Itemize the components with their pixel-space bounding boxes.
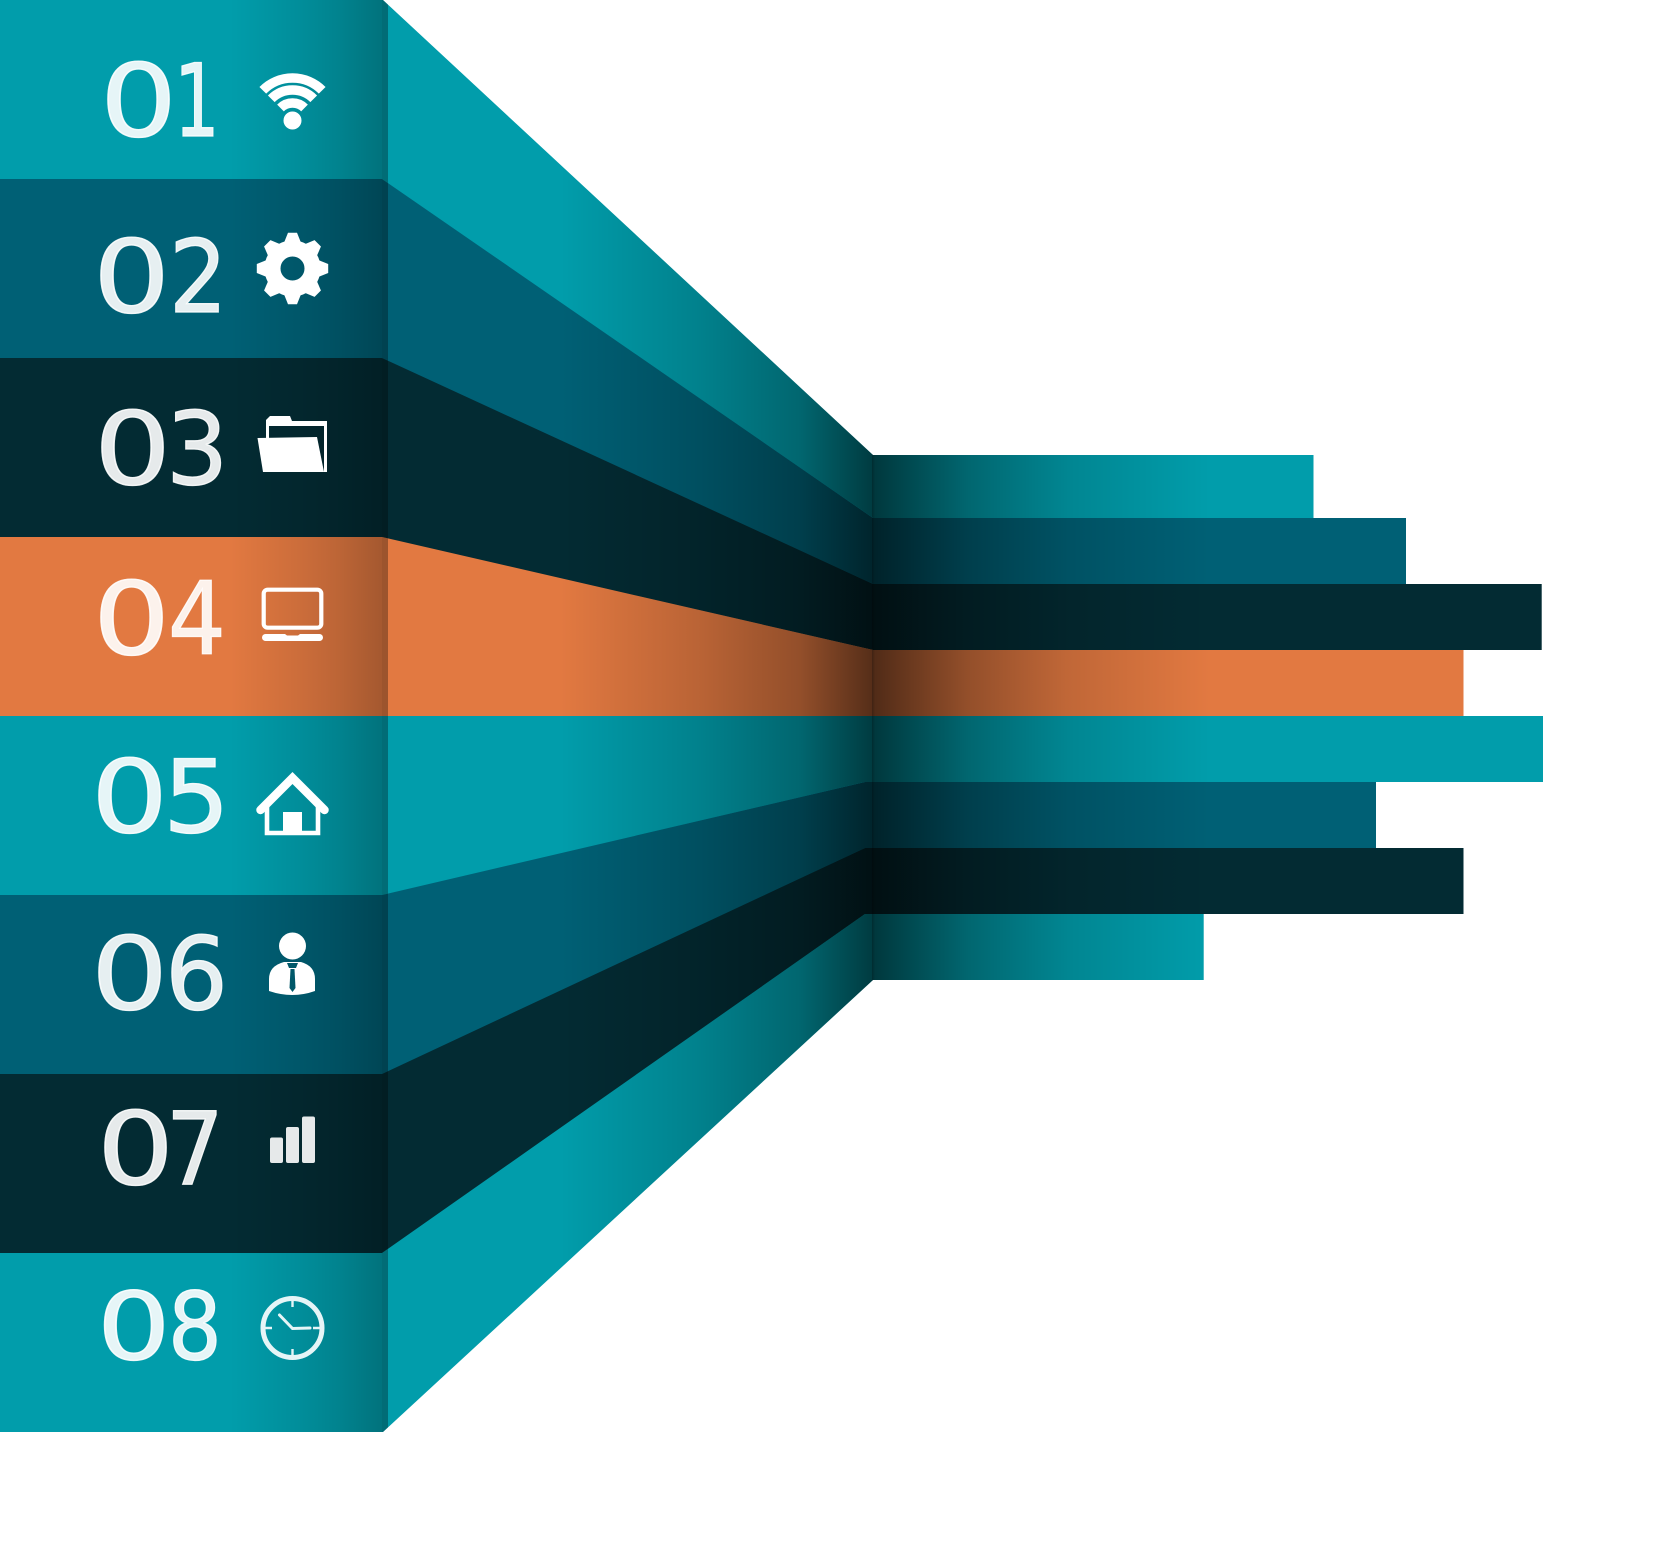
number 02 [93, 218, 227, 336]
icon: house [260, 778, 324, 833]
icon: businessperson [269, 932, 315, 995]
band 01 teal [0, 0, 1314, 519]
number 06 [91, 915, 228, 1033]
number 01: 0 [100, 42, 177, 160]
number 06: 6 [165, 915, 228, 1033]
number 08 [97, 1273, 221, 1382]
number 02: 2 [169, 218, 227, 336]
number 07: 7 [166, 1090, 224, 1208]
number 03 [94, 390, 228, 508]
band 08 teal [0, 914, 1204, 1432]
number 02: 0 [93, 218, 170, 336]
band 03 dark [0, 358, 1542, 651]
number 05: 0 [91, 738, 168, 856]
number 07: 0 [97, 1090, 174, 1208]
icon: gear [257, 233, 328, 304]
number 04: 0 [93, 560, 170, 678]
number 01: 1 [174, 42, 220, 160]
number 08: 8 [168, 1273, 221, 1382]
number 06: 0 [91, 915, 168, 1033]
icon: wifi [263, 78, 322, 130]
number 04 [93, 560, 226, 678]
number 03: 3 [166, 390, 228, 508]
number 05 [91, 738, 230, 856]
number 04: 4 [168, 560, 226, 678]
band 05 teal [0, 716, 1543, 896]
number 05: 5 [163, 738, 230, 856]
number 07 [97, 1090, 224, 1208]
icon: clock [263, 1298, 322, 1358]
icon: bar chart [270, 1116, 315, 1163]
icon: laptop [262, 590, 323, 641]
number 08: 0 [97, 1273, 171, 1382]
band 06 navy [0, 782, 1376, 1075]
icon: folder [258, 416, 327, 472]
band 04 orange [0, 537, 1464, 716]
band 07 dark [0, 848, 1464, 1254]
band 02 navy [0, 179, 1406, 585]
number 01 [100, 42, 220, 160]
number 03: 0 [94, 390, 171, 508]
